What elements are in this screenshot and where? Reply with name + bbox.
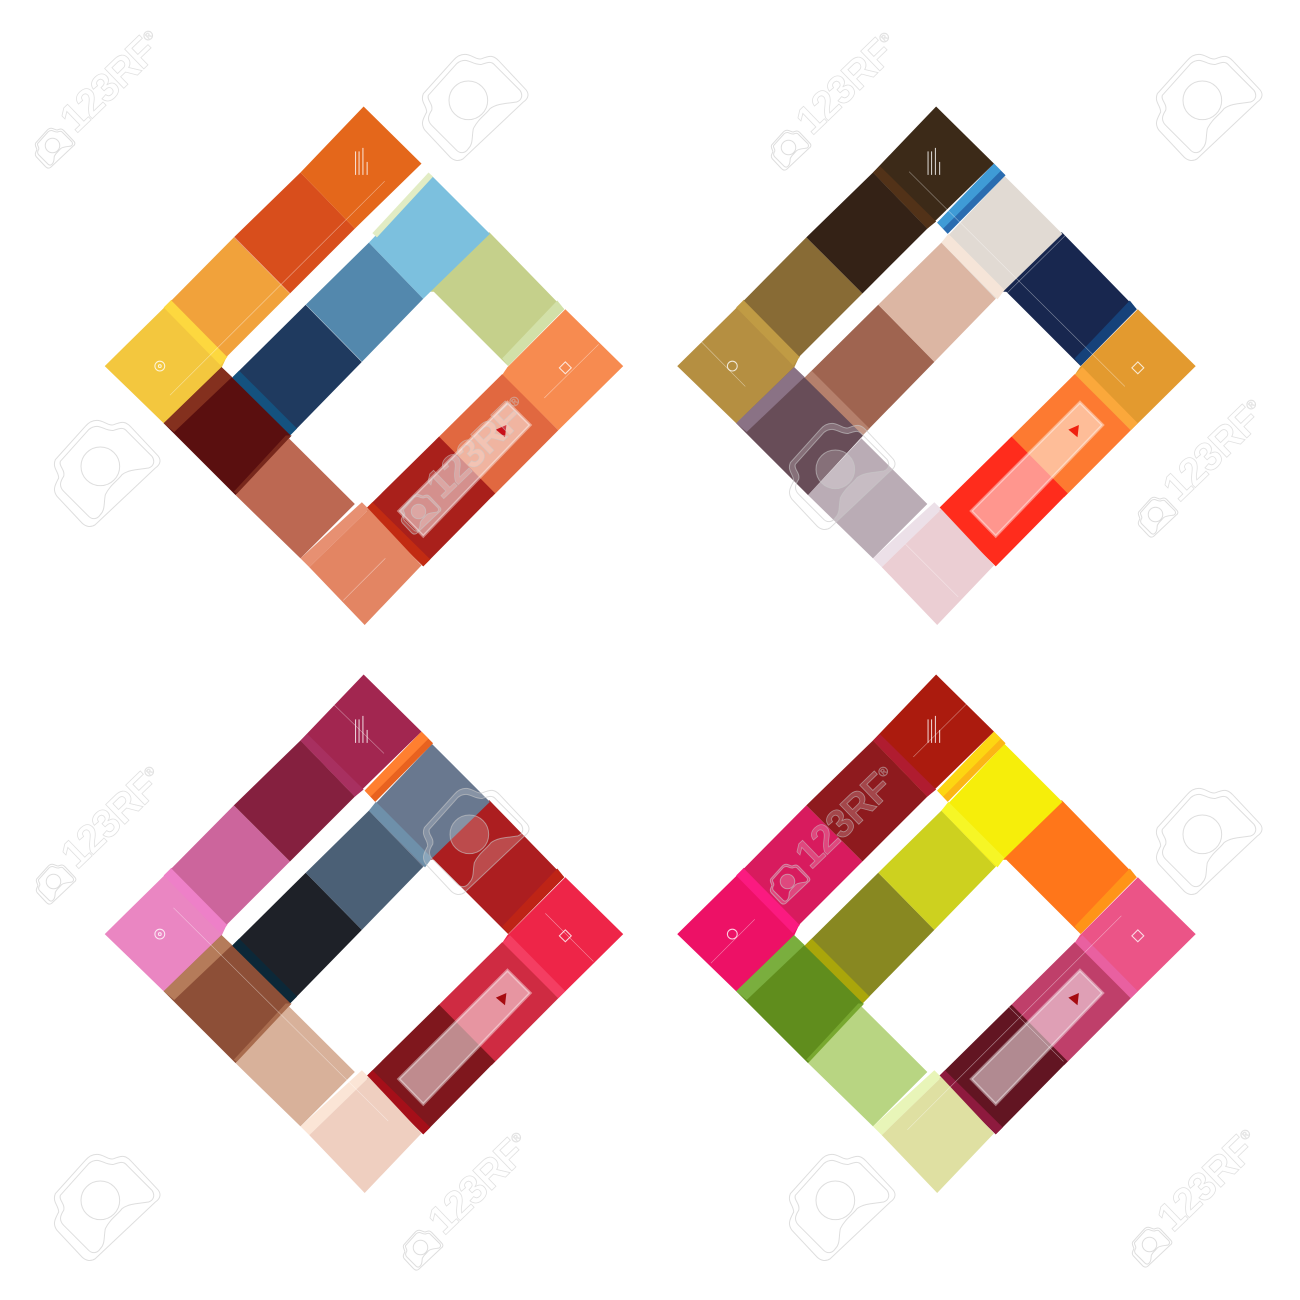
logo 4: ® (1243, 395, 1260, 413)
logo 4 (1138, 395, 1269, 537)
stamp 3 (54, 420, 160, 526)
strip: lower left tiles (164, 935, 422, 1193)
icon: bars (356, 716, 367, 743)
thin guide lines (711, 704, 1121, 1130)
strip: lower left tiles (736, 367, 994, 625)
logo 1 (35, 26, 166, 168)
logo 5: ® (141, 762, 158, 780)
stamp 6 (1156, 788, 1262, 894)
strip: upper-left browns (677, 106, 994, 423)
icon: circle (155, 929, 165, 939)
logo 5: 123RF (53, 765, 167, 877)
tile: dark red right strip band (502, 868, 564, 934)
diamond: pink, yellow and green (677, 674, 1196, 1193)
logo 8: 123RF (1149, 1128, 1263, 1240)
logo 8 (1132, 1125, 1263, 1267)
strip: lower left greens (736, 935, 994, 1193)
logo 4: 123RF (1155, 398, 1269, 510)
icon: circle (155, 361, 165, 371)
logo 2: ® (876, 28, 893, 46)
input box with arrow (399, 402, 530, 536)
logo 6: 123RF (420, 1131, 534, 1243)
logo 1: ® (140, 26, 157, 44)
icon: diamond (559, 362, 571, 374)
tile: navy right strip band (1075, 300, 1137, 366)
strip: lower left tiles (164, 367, 422, 625)
strip: upper-left pink to red (677, 674, 994, 991)
logo 1: 123RF (52, 29, 166, 141)
strip: lower right tiles (938, 374, 1131, 566)
stamp 8 (789, 1154, 895, 1260)
strip: upper-left yellow to orange (105, 106, 422, 423)
stamp 4 (789, 423, 895, 529)
icon: diamond (1132, 930, 1144, 942)
thin guide lines (701, 172, 1125, 597)
strip: lower right tiles (365, 374, 558, 566)
logo 3 (401, 392, 532, 534)
input box with arrow (399, 970, 530, 1104)
tile: orange right strip band (1075, 868, 1137, 934)
strip: inner tan tiles (804, 164, 1137, 436)
icon: diamond (559, 930, 571, 942)
diamond: magenta and slate (105, 674, 623, 1193)
logo 7: 123RF (787, 765, 901, 877)
tile: orange right corner (502, 309, 623, 430)
logo 2: 123RF (788, 31, 902, 143)
logo 6 (403, 1128, 534, 1270)
logo 3: 123RF (418, 395, 532, 507)
logo 5 (36, 762, 167, 904)
icon: circle (727, 929, 737, 939)
stamp 1 (422, 54, 528, 160)
thin guide lines (173, 704, 593, 1121)
icon: bars (928, 148, 940, 175)
logo 6: ® (508, 1128, 525, 1146)
logo 3: ® (506, 392, 523, 410)
strip: upper-left pinks (105, 674, 422, 991)
logo 7: ® (875, 762, 892, 780)
tile: crimson right corner (502, 877, 623, 998)
strip: lower right tiles (938, 942, 1131, 1134)
icon: bars (928, 716, 940, 743)
tile: amber right corner (1075, 309, 1196, 430)
logo 8: ® (1237, 1125, 1254, 1143)
stamp 5 (423, 788, 529, 894)
diamond: warm orange and blue (105, 106, 623, 625)
strip: inner olive and yellow tiles (804, 732, 1137, 1004)
tile: pink right corner (1075, 877, 1196, 998)
icon: circle (727, 361, 737, 371)
diamond: brown and navy (677, 106, 1196, 625)
logo 7 (770, 762, 901, 904)
strip: inner blue tiles (231, 172, 564, 436)
strip: lower right tiles (365, 942, 558, 1134)
strip: inner slate tiles (231, 732, 564, 1004)
icon: bars (356, 148, 367, 175)
input box with arrow (971, 402, 1103, 536)
tile: green right strip band (502, 300, 564, 366)
stamp 7 (54, 1154, 160, 1260)
input box with arrow (971, 970, 1103, 1104)
stamp 2 (1156, 54, 1262, 160)
logo 2 (771, 28, 902, 170)
icon: diamond (1132, 362, 1144, 374)
thin guide lines (170, 181, 599, 600)
